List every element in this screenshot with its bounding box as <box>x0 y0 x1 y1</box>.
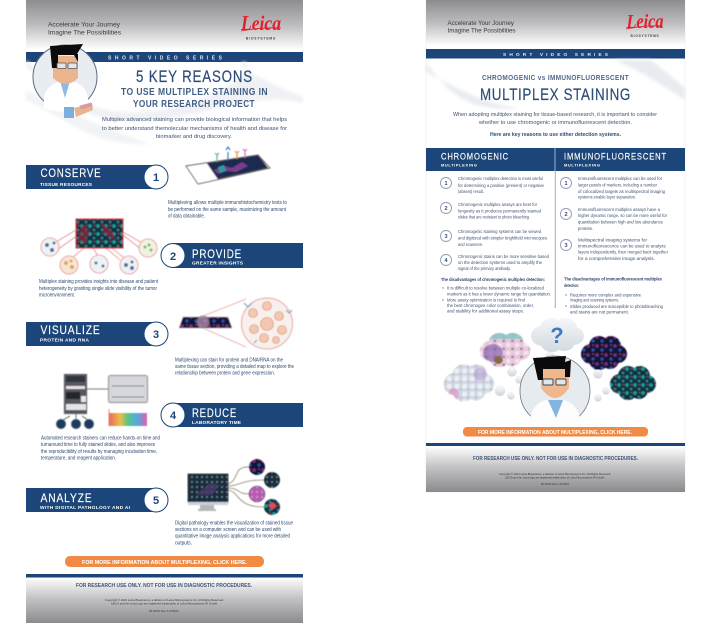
left call to action button: FOR MORE INFORMATION ABOUT MULTIPLEXING, CLICK HERE. <box>82 560 248 566</box>
text: section 5: Digital pathology enables the visualization of stained tissue <box>175 520 293 526</box>
immunofluorescent column: proteins. <box>578 226 593 231</box>
right intro text <box>453 112 657 138</box>
immunofluorescent column: of colocalized targets as multispectral imaging <box>578 189 665 194</box>
left call to action button <box>65 556 264 567</box>
section 5 banner: analyze: 5 <box>153 495 159 507</box>
chromogenic column: 1 <box>444 181 448 187</box>
right series band: SHORT VIDEO SERIES <box>503 52 609 58</box>
thought cloud: question mark: ? <box>550 323 564 348</box>
right title <box>480 75 631 104</box>
section 4 banner: reduce: REDUCE <box>192 406 237 420</box>
left series band: SHORT VIDEO SERIES <box>108 56 223 62</box>
right call to action button: FOR MORE INFORMATION ABOUT MULTIPLEXING, CLICK HERE. <box>478 430 633 436</box>
left footer: 95.18797 Rev A 07/2021 <box>149 609 179 613</box>
chromogenic column: More assay optimization is required to find <box>447 298 525 302</box>
icon: automated stainer, slide rack and heat map <box>56 374 148 429</box>
left header <box>26 0 303 50</box>
immunofluorescent column: Slides produced are susceptible to photobleaching <box>570 304 663 309</box>
immunofluorescent column: immunofluorescence can be used to analyze <box>578 244 666 248</box>
logo: Leica: BIOSYSTEMS <box>246 36 276 40</box>
section 2 banner: provide <box>161 243 303 268</box>
right title: MULTIPLEX STAINING <box>480 86 631 104</box>
section 2 banner: provide: PROVIDE <box>192 247 242 261</box>
left header: Imagine The Possibilities <box>48 30 122 36</box>
comparison header band: CHROMOGENIC <box>441 152 509 162</box>
icon: monitor with digital pathology images <box>188 459 280 515</box>
panel: right infographic <box>426 0 685 492</box>
text: section 2: microenvironment. <box>39 292 75 298</box>
right series band <box>426 49 685 58</box>
immunofluorescent column: for a comprehensive image analysis. <box>578 256 655 261</box>
left intro text: Multiplex advanced staining can provide biological information that helps <box>102 117 287 123</box>
chromogenic column: and digitized with simpler brightfield microscopes <box>458 236 548 240</box>
section 2 banner: provide: GREATER INSIGHTS <box>192 260 244 266</box>
left footer <box>26 574 303 623</box>
immunofluorescent column: 2 <box>564 212 568 218</box>
right footer <box>426 443 685 492</box>
chromogenic column: signal of the primary antibody. <box>458 266 511 271</box>
logo: Leica: BIOSYSTEMS <box>631 34 659 38</box>
comparison header band <box>426 148 685 171</box>
right intro text: whether to use chromogenic or immunofluorescent detection. <box>479 120 632 126</box>
chromogenic column: 3 <box>444 234 448 240</box>
left footer: FOR RESEARCH USE ONLY. NOT FOR USE IN DIAGNOSTIC PROCEDURES. <box>76 583 252 589</box>
immunofluorescent column: larger panels of markers, including a number <box>578 182 657 188</box>
number badges <box>560 178 572 250</box>
left footer: Copyright © 2021 Leica Biosystems, a division of Leica Microsystems Inc. All Rights Reserved. <box>105 598 224 602</box>
text: section 2 <box>39 279 159 298</box>
chromogenic column: Chromogenic multiplex detection is most useful <box>458 176 543 181</box>
right intro text: When adopting multiplex staining for tissue-based research, it is important to consider <box>453 112 657 118</box>
immunofluorescent column: systems enable layer separation. <box>578 194 636 200</box>
text: section 1: Multiplexing allows multiple immunohistochemistry tests to <box>168 200 287 206</box>
logo: Leica <box>626 11 664 38</box>
illustration: scientist with thought clouds <box>444 318 657 418</box>
immunofluorescent column: and stains are not permanent. <box>570 310 629 314</box>
chromogenic column: It is difficult to resolve between multiple co-localized <box>447 286 544 290</box>
comparison header band: IMMUNOFLUORESCENT <box>564 152 667 162</box>
section 1 banner: conserve: TISSUE RESOURCES <box>40 182 93 188</box>
text: section 3 <box>175 358 294 376</box>
text: section 5: sections on a computer screen and can be used with <box>175 527 281 533</box>
immunofluorescent column: imaging and scanning systems. <box>570 298 619 302</box>
logo: Leica <box>240 11 281 40</box>
text: section 3: relationship between protein and gene expression. <box>175 370 275 376</box>
immunofluorescent column <box>560 176 668 314</box>
immunofluorescent column: Multispectral imaging systems for <box>578 238 647 242</box>
thought cloud: question mark <box>531 318 584 352</box>
icon: tissue image with cell callouts <box>41 219 157 274</box>
chromogenic column: Chromogenic staining systems can be viewed <box>458 229 541 234</box>
left intro text <box>102 117 287 140</box>
thought bubbles <box>495 352 610 402</box>
left title <box>121 68 268 110</box>
immunofluorescent column: higher dynamic range, so can be more useful for <box>578 213 667 218</box>
section 4 banner: reduce <box>161 403 303 427</box>
tissue cloud 2 <box>479 332 531 368</box>
right footer: FOR RESEARCH USE ONLY. NOT FOR USE IN DIAGNOSTIC PROCEDURES. <box>473 456 638 462</box>
immunofluorescent column: 1 <box>564 181 568 187</box>
chromogenic column: slides that are resistant to photo bleaching. <box>458 214 530 220</box>
right footer: 95.18797 Rev A 07/2021 <box>541 482 569 486</box>
text: section 2: heterogeneity by granting single slide visibility of the tumor <box>39 286 157 292</box>
left intro text: to better understand themolecular mechanisms of health and disease for <box>102 126 287 132</box>
chromogenic column: and scanners. <box>458 242 483 247</box>
left series band <box>26 52 303 62</box>
left header: Accelerate Your Journey <box>48 22 121 28</box>
right title: CHROMOGENIC vs IMMUNOFLUORESCENT <box>482 75 629 82</box>
chromogenic column: The disadvantages of chromogenic multiplex detection: <box>441 277 545 282</box>
text: section 5: outputs. <box>175 540 192 546</box>
chromogenic column: (absent) result. <box>458 189 484 194</box>
text: section 5 <box>175 520 293 546</box>
scientist portrait <box>520 356 590 428</box>
chromogenic column: longevity as it produces permanently stained <box>458 208 541 214</box>
section 1 banner: conserve <box>26 165 168 189</box>
immunofluorescent column: The disadvantages of immunofluorescent multiplex <box>564 276 662 282</box>
chromogenic column: the best chromogen color combination, order, <box>447 303 534 308</box>
immunofluorescent column: Immunofluorescent multiplex assays have a <box>578 207 660 212</box>
comparison header band: MULTIPLEXING <box>564 162 600 168</box>
text: section 1: of data obtainable. <box>168 214 205 220</box>
section 3 banner: visualize: 3 <box>153 329 159 341</box>
text: section 3: same tissue section, providing a detailed map to explore the <box>175 364 294 370</box>
immunofluorescent column: Immunofluorescent multiplex can be used for <box>578 176 662 181</box>
section 3 banner: visualize: VISUALIZE <box>40 323 100 337</box>
tissue cloud 3 <box>580 335 628 370</box>
left title: 5 KEY REASONS <box>136 68 253 86</box>
logo: Leica: Leica <box>240 11 281 35</box>
text: section 1 <box>168 200 287 220</box>
logo: Leica: Leica <box>626 11 664 33</box>
right intro text: Here are key reasons to use either detection systems. <box>490 132 622 138</box>
section 1 banner: conserve: CONSERVE <box>40 166 102 180</box>
icon: slide with antibodies <box>186 147 270 184</box>
text: section 3: Multiplexing can stain for protein and DNA/RNA on the <box>175 358 283 364</box>
comparison header band: MULTIPLEXING <box>441 162 477 168</box>
section 1 banner: conserve: 1 <box>153 172 159 184</box>
chromogenic column: markers as it has a lower dynamic range for quantitation. <box>447 292 551 296</box>
section 5 banner: analyze <box>26 488 168 512</box>
section 4 banner: reduce: LABORATORY TIME <box>192 420 242 426</box>
text: section 4: Automated research stainers can reduce hands-on time and <box>41 436 160 442</box>
section 2 banner: provide: 2 <box>170 251 176 263</box>
section 5 banner: analyze: WITH DIGITAL PATHOLOGY AND AI <box>40 505 131 511</box>
background waves <box>26 60 303 121</box>
chromogenic column <box>440 176 551 314</box>
icon: slide, lens and magnified cells <box>179 298 292 349</box>
tissue cloud 1 <box>444 364 494 402</box>
scientist illustration <box>33 44 97 118</box>
section 3 banner: visualize: PROTEIN AND RNA <box>40 338 90 344</box>
number badges <box>440 178 452 266</box>
right call to action button <box>463 427 648 436</box>
tissue cloud 4 <box>609 365 657 401</box>
immunofluorescent column: layers independently, then merged back together <box>578 250 668 254</box>
immunofluorescent column: quantitation between high and low abundance <box>578 220 663 224</box>
left title: YOUR RESEARCH PROJECT <box>133 99 255 110</box>
right header: Imagine The Possibilities <box>448 28 516 34</box>
left title: TO USE MULTIPLEX STAINING IN <box>121 87 268 98</box>
text: section 5: quantitative image analysis applications for more detailed <box>175 534 290 540</box>
immunofluorescent column: Requires more complex and expensive <box>570 292 641 298</box>
immunofluorescent column: detection: <box>564 283 579 288</box>
background waves <box>426 60 685 109</box>
immunofluorescent column: 3 <box>564 243 568 249</box>
section 4 banner: reduce: 4 <box>170 410 177 422</box>
text: section 1: be performed on the same sample, maximizing the amount <box>168 207 287 213</box>
text: section 4 <box>41 436 160 462</box>
right header <box>426 0 685 46</box>
section 3 banner: visualize <box>26 322 168 346</box>
left footer: LEICA and the Leica logo are registered trademarks of Leica Microsystems IR GmbH. <box>111 602 218 606</box>
chromogenic column: 4 <box>444 258 448 264</box>
chromogenic column: on the detection systems used to amplify the <box>458 260 542 265</box>
panel: left infographic <box>26 0 303 623</box>
chromogenic column: Chromogenic stains can be more sensitive based <box>458 254 549 259</box>
chromogenic column: for determining a positive (present) or negative <box>458 183 544 188</box>
right footer: LEICA and the Leica logo are registered trademarks of Leica Microsystems IR GmbH. <box>505 476 605 480</box>
chromogenic column: Chromogenic multiplex assays are best for <box>458 202 537 207</box>
right footer: Copyright © 2021 Leica Biosystems, a division of Leica Microsystems Inc. All Rights Reserved. <box>499 472 611 476</box>
text: section 4: turnaround time to fully stained slides, and also improves <box>41 442 155 448</box>
right header: Accelerate Your Journey <box>448 20 515 27</box>
chromogenic column: 2 <box>444 206 448 212</box>
text: section 4: the reproducibility of results by managing incubation time, <box>41 449 157 455</box>
section 5 banner: analyze: ANALYZE <box>40 491 92 505</box>
text: section 2: Multiplex staining provides insights into disease and patient <box>39 279 159 285</box>
text: section 4: temperature, and reagent application. <box>41 456 116 462</box>
left intro text: biomarker and drug discovery. <box>156 134 232 140</box>
chromogenic column: and stability for additional assay steps. <box>447 308 524 314</box>
